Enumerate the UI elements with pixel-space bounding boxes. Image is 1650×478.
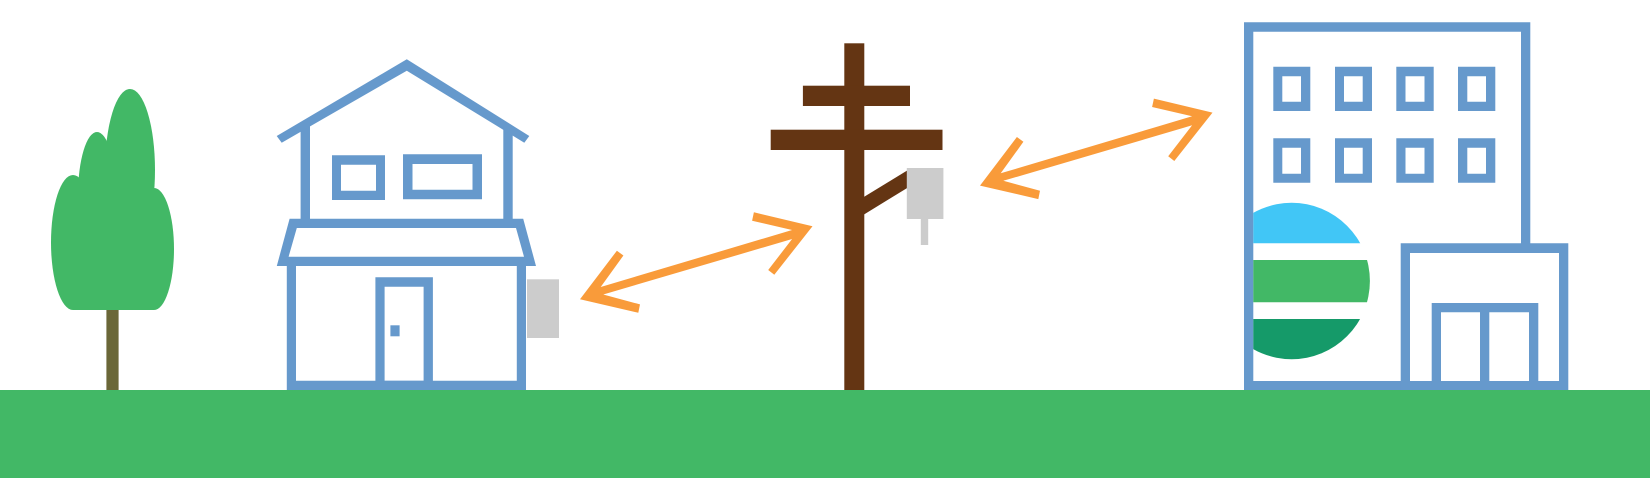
building annex (1401, 243, 1568, 391)
icon: office building (1214, 22, 1568, 391)
house upper right window (403, 154, 482, 199)
icon: house (277, 59, 536, 391)
house awning (277, 219, 536, 266)
icon: tree (51, 89, 174, 391)
building entrance doors (1432, 303, 1538, 385)
icon: utility pole (771, 43, 943, 391)
logo: striped circle (1253, 202, 1370, 360)
house roof (277, 59, 529, 143)
pole meter box (907, 168, 943, 219)
ground (0, 390, 1650, 478)
door knob (390, 325, 400, 336)
pole meter stem (921, 219, 928, 245)
house upper left window (332, 155, 385, 200)
arrow: pole to building (980, 99, 1212, 199)
building tower outline (1244, 22, 1530, 391)
building windows (1273, 67, 1495, 183)
house lower walls (287, 264, 526, 391)
icon: house meter (527, 279, 559, 338)
house door (375, 277, 433, 385)
house upper walls (301, 124, 513, 222)
arrow: house to pole (580, 212, 812, 313)
